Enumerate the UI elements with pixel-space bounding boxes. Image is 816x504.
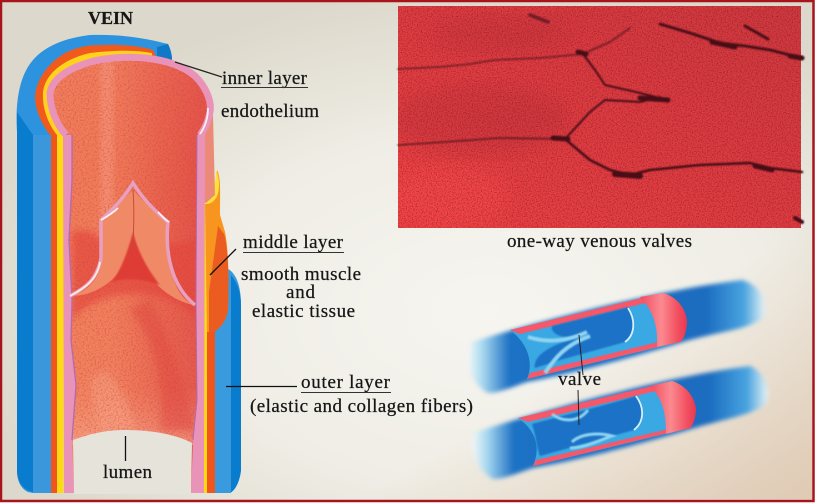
label: inner layer: inner layer (222, 68, 308, 89)
label: middle layer (210, 232, 344, 275)
label: smooth muscle and elastic tissue: smooth muscle (241, 264, 361, 285)
dark vessel lines (398, 15, 802, 222)
label: smooth muscle and elastic tissue: elastic tissue (252, 301, 355, 322)
label: endothelium: endothelium (221, 101, 319, 122)
title: VEIN (88, 8, 133, 28)
label: valve: valve (558, 369, 601, 390)
label: smooth muscle and elastic tissue (241, 264, 361, 322)
vein cross-section illustration (17, 35, 241, 494)
vein diagram: open valve (468, 280, 765, 393)
inner layer: endothelium lining (50, 57, 210, 493)
middle layer: orange band and yellow line (35, 45, 229, 493)
lumen pointer line (124, 436, 126, 461)
lumen opening (73, 430, 192, 494)
label: inner layer (175, 62, 308, 89)
label: outer layer: outer layer (301, 372, 391, 393)
outer layer: right wall (214, 268, 241, 493)
label: lumen: lumen (103, 462, 152, 483)
outer wall tissue beside the lumen (200, 115, 215, 203)
photo: one-way venous valves (390, 6, 802, 228)
label: elastic and collagen fibers: (elastic and collagen fibers) (250, 396, 473, 417)
valve leaflets (70, 183, 195, 305)
label: middle layer: middle layer (243, 232, 344, 253)
outer layer: left wall and cap (17, 35, 172, 493)
lumen interior wall (50, 55, 210, 493)
vein diagram: closed valve (472, 366, 768, 479)
valve pointer lines (578, 335, 583, 425)
caption: one-way venous valves: one-way venous valves (507, 231, 692, 252)
label: smooth muscle and elastic tissue: and (286, 282, 316, 303)
